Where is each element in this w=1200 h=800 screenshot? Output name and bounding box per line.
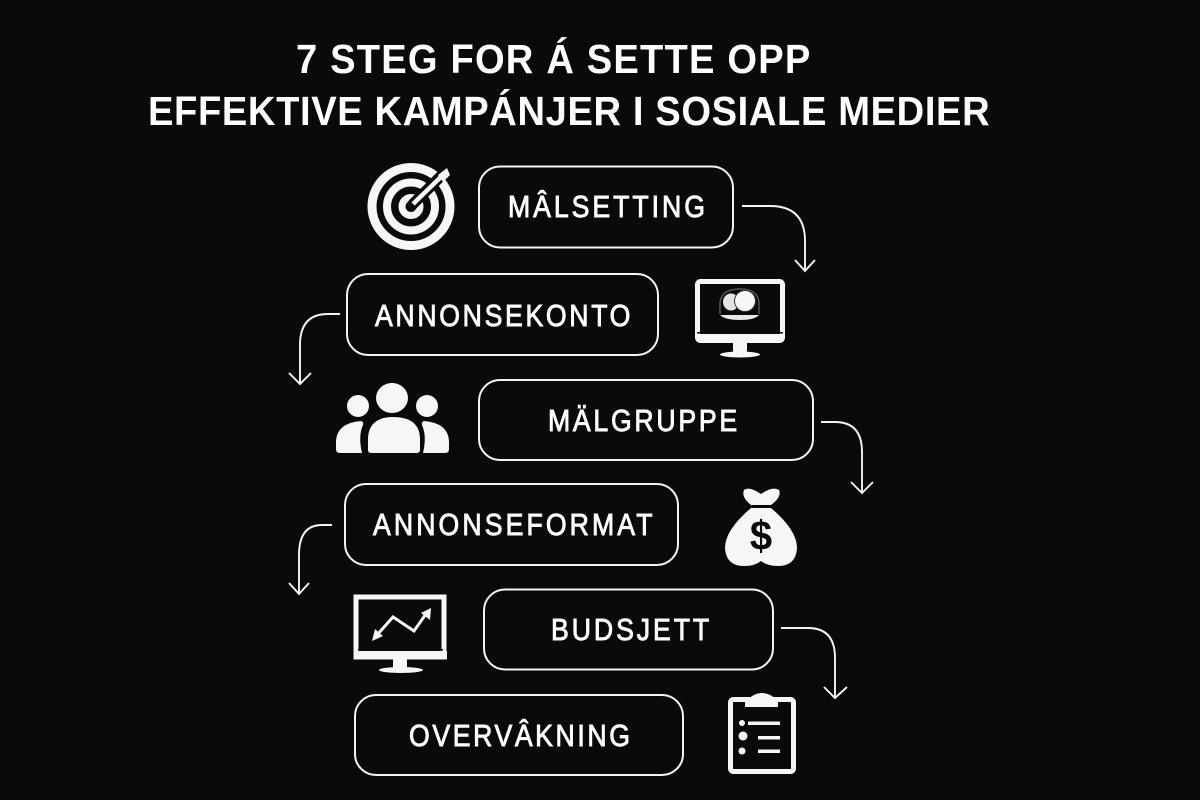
- arrow: step 4 to step 5: [289, 525, 332, 594]
- step 5: Budsjett box: [484, 590, 773, 670]
- step 3: Målgruppe box: MÄLGRUPPE: [548, 404, 737, 439]
- title: EFFEKTIVE KAMPÁNJER I SOSIALE MEDIER: [148, 89, 990, 134]
- step 4: Annonseformat box: ANNONSEFORMAT: [373, 508, 653, 543]
- arrow: step 5 to step 6: [781, 628, 847, 698]
- step 4: Annonseformat box: [345, 484, 678, 565]
- arrow: step 3 to step 4: [821, 422, 873, 493]
- icon: target with dart: [372, 168, 450, 246]
- step 5: Budsjett box: BUDSJETT: [551, 613, 709, 648]
- arrow: step 1 to step 2: [742, 206, 815, 271]
- icon: monitor with profile: [697, 282, 783, 358]
- step 3: Målgruppe box: [479, 380, 813, 460]
- arrow: step 2 to step 3: [289, 314, 340, 384]
- icon: monitor with trend chart: [354, 597, 447, 673]
- icon: money bag: $: [750, 512, 772, 559]
- step 1: Målsetting box: MÂLSETTING: [508, 189, 705, 225]
- step 1: Målsetting box: [479, 166, 733, 248]
- icon: clipboard checklist: [730, 693, 794, 772]
- step 2: Annonsekonto box: ANNONSEKONTO: [375, 299, 630, 334]
- title: [148, 37, 990, 134]
- step 2: Annonsekonto box: [347, 274, 658, 355]
- icon: group of people: [336, 383, 449, 453]
- icon: money bag: [725, 489, 797, 566]
- step 6: Overvåkning box: [355, 695, 683, 775]
- title: 7 STEG FOR Á SETTE OPP: [296, 37, 810, 82]
- step 6: Overvåkning box: OVERVÂKNING: [409, 718, 630, 754]
